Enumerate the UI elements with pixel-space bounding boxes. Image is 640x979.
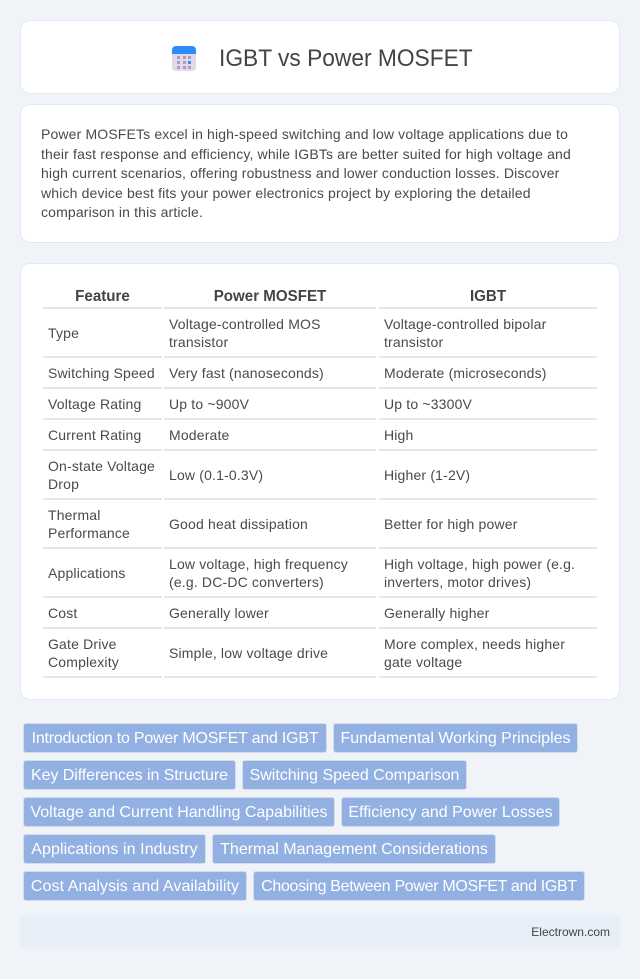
- row: voltage rating: Up to ~3300V: [384, 396, 472, 412]
- comparison table card: [20, 263, 620, 700]
- table header: [75, 288, 506, 305]
- intro text: high current scenarios, offering robustness and lower conduction losses. Discover: [41, 165, 560, 181]
- footer source text: Electrown.com: [531, 925, 610, 939]
- row: on-state voltage drop: Low (0.1-0.3V): [169, 467, 263, 483]
- row: gate drive complexity: gate voltage: [384, 654, 462, 670]
- row: applications: Low voltage, high frequency: [169, 556, 348, 572]
- intro text: their fast response and efficiency, while IGBTs are better suited for high voltage and: [41, 146, 571, 162]
- row: switching speed: Very fast (nanoseconds): [169, 365, 324, 381]
- row: cost: Generally lower: [169, 605, 269, 621]
- row: gate drive complexity: More complex, needs higher: [384, 636, 565, 652]
- tag: Introduction to Power MOSFET and IGBT: [32, 730, 318, 747]
- row: switching speed: [48, 365, 547, 381]
- tag: Cost Analysis and Availability: [31, 878, 239, 895]
- tag: Thermal Management Considerations: [220, 841, 488, 858]
- footer: [20, 915, 620, 949]
- row: thermal performance: Thermal: [48, 507, 101, 523]
- tag: Choosing Between Power MOSFET and IGBT: [261, 878, 577, 895]
- row: gate drive complexity: Simple, low voltage drive: [169, 645, 328, 661]
- tag: [242, 760, 467, 790]
- tag: Voltage and Current Handling Capabilities: [30, 804, 328, 821]
- row: thermal performance: Performance: [48, 525, 130, 541]
- row: on-state voltage drop: On-state Voltage: [48, 458, 155, 474]
- row: type: Voltage-controlled MOS: [169, 316, 321, 332]
- tag: [212, 834, 496, 864]
- row: type: Type: [48, 325, 79, 341]
- tag: [341, 797, 560, 827]
- row: voltage rating: Voltage Rating: [48, 396, 141, 412]
- row: gate drive complexity: Gate Drive: [48, 636, 117, 652]
- row: type: transistor: [384, 334, 443, 350]
- tag: [23, 723, 327, 753]
- row: applications: [48, 556, 575, 590]
- tag: Efficiency and Power Losses: [348, 804, 553, 821]
- intro text: Power MOSFETs excel in high-speed switching and low voltage applications due to: [41, 126, 568, 142]
- intro card: [20, 104, 620, 243]
- tag: Applications in Industry: [31, 841, 198, 858]
- intro text: [41, 126, 571, 220]
- row: cost: Generally higher: [384, 605, 489, 621]
- intro text: which device best fits your power electronics project by exploring the detailed: [41, 185, 531, 201]
- tag: [23, 760, 236, 790]
- table header: Feature: [75, 288, 130, 305]
- row: applications: inverters, motor drives): [384, 574, 531, 590]
- row: voltage rating: Up to ~900V: [169, 396, 249, 412]
- tag: Key Differences in Structure: [31, 767, 228, 784]
- row: on-state voltage drop: Higher (1-2V): [384, 467, 470, 483]
- row: applications: Applications: [48, 565, 126, 581]
- tag: [23, 797, 335, 827]
- row: on-state voltage drop: [48, 458, 470, 492]
- tag: Fundamental Working Principles: [340, 730, 571, 747]
- table header: IGBT: [470, 288, 506, 305]
- table header: Power MOSFET: [214, 288, 326, 305]
- row: current rating: [48, 427, 413, 443]
- row: type: Voltage-controlled bipolar: [384, 316, 546, 332]
- row: applications: High voltage, high power (e.g.: [384, 556, 575, 572]
- row: gate drive complexity: [48, 636, 565, 670]
- row: thermal performance: [48, 507, 518, 541]
- row: switching speed: Switching Speed: [48, 365, 155, 381]
- tag: [23, 834, 206, 864]
- row: current rating: High: [384, 427, 413, 443]
- row: cost: [48, 605, 490, 621]
- row: type: transistor: [169, 334, 228, 350]
- row: thermal performance: Better for high power: [384, 516, 518, 532]
- row: voltage rating: [48, 396, 472, 412]
- header card: [20, 20, 620, 94]
- row: switching speed: Moderate (microseconds): [384, 365, 547, 381]
- tag: [333, 723, 578, 753]
- row: gate drive complexity: Complexity: [48, 654, 119, 670]
- row: cost: Cost: [48, 605, 77, 621]
- tag: [23, 871, 247, 901]
- row: current rating: Current Rating: [48, 427, 141, 443]
- intro text: comparison in this article.: [41, 204, 203, 220]
- tag: [253, 871, 585, 901]
- row: type: [48, 316, 546, 350]
- row: current rating: Moderate: [169, 427, 230, 443]
- icon: calendar grid: [172, 46, 196, 71]
- row: on-state voltage drop: Drop: [48, 476, 79, 492]
- topic tags: [23, 723, 585, 901]
- row: thermal performance: Good heat dissipation: [169, 516, 308, 532]
- row: applications: (e.g. DC-DC converters): [169, 574, 324, 590]
- tag: Switching Speed Comparison: [250, 767, 459, 784]
- title: IGBT vs Power MOSFET: [219, 45, 473, 72]
